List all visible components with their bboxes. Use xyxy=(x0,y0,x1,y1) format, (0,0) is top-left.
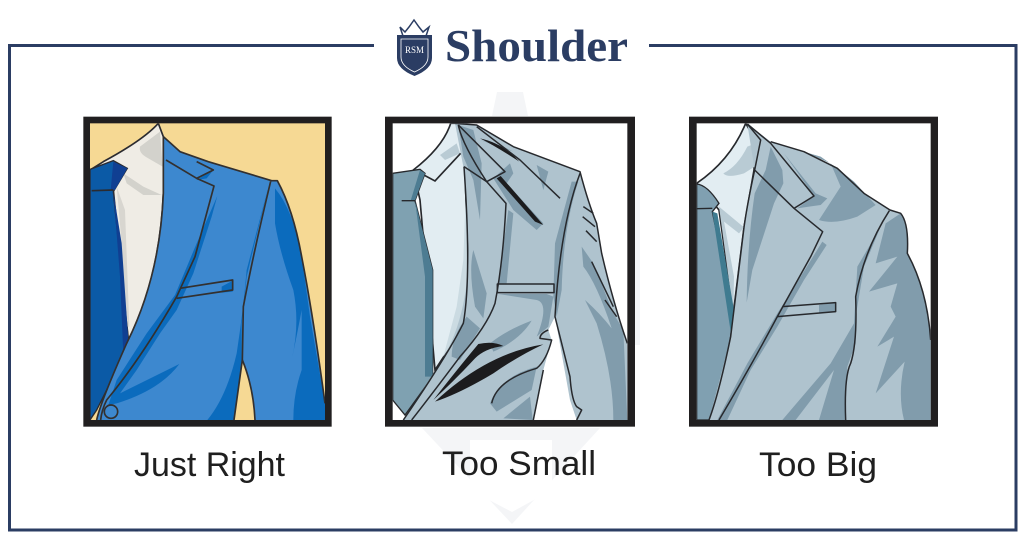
jacket shadows xyxy=(717,145,931,420)
tie xyxy=(697,184,733,420)
shirt collar xyxy=(413,153,461,181)
watermark shield xyxy=(385,92,640,524)
jacket lines xyxy=(97,137,325,420)
logo crest xyxy=(397,20,432,76)
jacket shadows xyxy=(452,125,627,420)
panel: too big xyxy=(689,117,938,427)
tie xyxy=(90,161,128,420)
jacket xyxy=(403,123,627,420)
label: too big: Too Big xyxy=(759,446,877,484)
shirt xyxy=(697,123,756,313)
monogram: RSM xyxy=(405,45,424,55)
label: too small: Too Small xyxy=(442,445,596,483)
jacket lines xyxy=(709,124,931,420)
tie xyxy=(393,169,433,415)
jacket xyxy=(709,124,931,420)
shirt xyxy=(90,123,163,340)
jacket shadows xyxy=(108,170,325,420)
title: Shoulder xyxy=(445,20,628,71)
crown xyxy=(400,20,429,36)
jacket xyxy=(97,137,325,420)
jacket dark creases xyxy=(433,138,543,402)
panel: too small xyxy=(385,117,635,427)
shirt xyxy=(413,123,470,370)
shield xyxy=(397,35,432,76)
jacket lines xyxy=(403,123,627,420)
panel: just right xyxy=(83,117,332,427)
label: just right: Just Right xyxy=(134,446,286,484)
